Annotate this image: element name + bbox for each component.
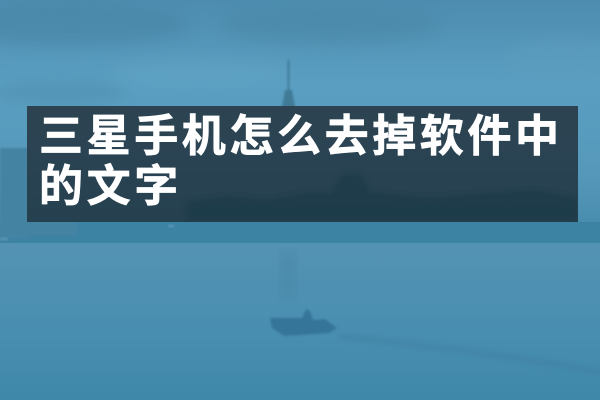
- left buildings: [0, 148, 77, 238]
- title text: 三星手机怎么去掉软件中的文字: [39, 112, 563, 211]
- clouds: [0, 5, 600, 104]
- boat wake: [340, 336, 600, 372]
- sky: [0, 0, 600, 245]
- shore lights: [0, 225, 174, 240]
- tower reflection: [280, 252, 296, 297]
- silhouette inside banner: [188, 175, 576, 216]
- far shore band: [0, 222, 600, 243]
- water: [0, 243, 600, 400]
- tower: [280, 60, 297, 178]
- title banner: [27, 106, 578, 222]
- boat: [270, 309, 337, 336]
